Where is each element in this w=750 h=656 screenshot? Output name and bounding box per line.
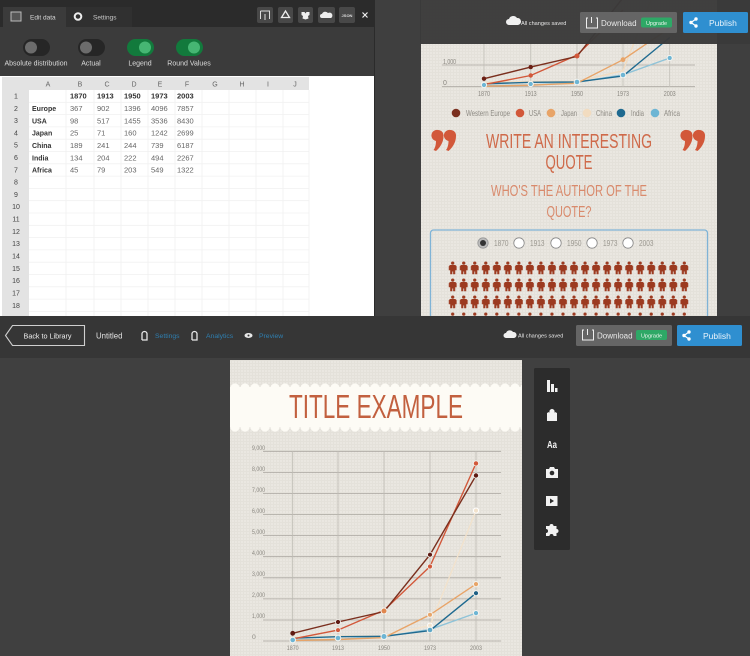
publish button: Publish (709, 18, 737, 28)
data values: 203 (124, 166, 137, 174)
top toolbar: save, download, publish: All changes saved (521, 21, 566, 27)
y axis labels: 2,000 (252, 592, 265, 599)
export icons: JSON (342, 13, 353, 18)
row numbers: 18 (12, 303, 20, 310)
row numbers: 17 (12, 290, 20, 298)
series: Japan (293, 582, 479, 640)
icon: right quote mark (680, 130, 705, 151)
legend: China (596, 108, 612, 118)
column headers: E (158, 82, 163, 88)
row numbers: 7 (14, 168, 18, 174)
y axis labels: 8,000 (252, 466, 265, 473)
line chart: upper crop: 1870 (478, 91, 490, 98)
legend: Africa (664, 108, 680, 118)
back to library button: Back to Library (24, 332, 72, 340)
quote author: QUOTE? (546, 204, 592, 221)
column headers: G (212, 82, 218, 88)
icon: gear (75, 13, 81, 20)
legend (452, 108, 680, 118)
line chart (252, 445, 501, 652)
region names: Europe (32, 106, 56, 113)
icon: table (11, 12, 21, 21)
data values: 1322 (177, 166, 194, 174)
back to library button (6, 326, 84, 346)
series: China (293, 508, 479, 637)
series: USA (293, 461, 479, 639)
download button: Upgrade (646, 21, 667, 27)
tab bar (3, 7, 132, 27)
data values: 2699 (177, 128, 194, 138)
column headers: F (185, 82, 189, 88)
options toolbar with toggles: Actual (81, 60, 101, 68)
header years: 1870 (70, 92, 87, 101)
download button: Download (601, 19, 637, 28)
tab bar: Settings (93, 14, 117, 22)
tab bar: Edit data (30, 14, 56, 22)
quote heading: WRITE AN INTERESTING (486, 131, 652, 153)
data values: 549 (151, 166, 164, 174)
row numbers: 4 (14, 130, 18, 138)
line chart: upper crop: 1950 (571, 91, 583, 98)
infographic page: quote section (421, 44, 717, 316)
data values: 4096 (151, 104, 168, 113)
data values: 6187 (177, 141, 194, 150)
header years: 1973 (151, 92, 168, 101)
data values: 222 (124, 153, 137, 162)
row numbers: 6 (14, 155, 18, 162)
line chart: upper crop: 2003 (664, 91, 676, 98)
panel: tool sidebar (534, 368, 570, 550)
icon: map (547, 409, 557, 421)
download button: Upgrade (641, 333, 662, 339)
data values: 494 (151, 153, 164, 162)
data values: 241 (97, 141, 110, 150)
navigation links: Analytics (206, 333, 234, 340)
document name: Untitled (96, 332, 122, 340)
column headers (46, 82, 297, 88)
data values: 189 (70, 141, 83, 150)
data values: 45 (70, 166, 78, 174)
row numbers (12, 94, 20, 310)
data values (70, 104, 194, 174)
region names: USA (32, 118, 47, 125)
radio year selector: 1913 (530, 239, 545, 248)
x axis labels: 2003 (470, 645, 482, 652)
row numbers: 14 (12, 254, 20, 260)
column headers: B (78, 82, 83, 88)
y axis labels: 6,000 (252, 508, 265, 515)
legend: Western Europe (466, 108, 510, 118)
icon: left quote mark (431, 130, 456, 151)
quote heading (486, 131, 652, 174)
radio year selector: 1973 (603, 239, 618, 248)
legend: India (631, 108, 644, 118)
pictogram box (430, 229, 708, 316)
x axis labels: 1870 (287, 645, 299, 652)
line chart: upper crop: 0 (443, 80, 447, 87)
y axis labels: 3,000 (252, 571, 265, 578)
row numbers: 15 (12, 266, 20, 273)
data values: 902 (97, 104, 110, 113)
panel: top-right editor view (421, 12, 748, 316)
header years: 1950 (124, 92, 141, 101)
panel: infographic page with title and chart (230, 360, 522, 656)
y axis labels (252, 445, 265, 641)
icon: chart (547, 380, 558, 392)
data values: 244 (124, 141, 137, 150)
row numbers: 10 (12, 204, 20, 211)
icon: video (546, 496, 558, 506)
row numbers: 2 (14, 106, 18, 113)
data values: 517 (97, 116, 110, 125)
icon: camera (546, 467, 558, 478)
y axis labels: 7,000 (252, 487, 265, 494)
panel: data editor (0, 0, 375, 316)
region names: China (32, 143, 52, 150)
options toolbar with toggles: Legend (128, 60, 152, 68)
publish button (677, 325, 742, 346)
data values: 739 (151, 141, 164, 150)
radio year selector: 2003 (639, 239, 654, 248)
region names: Japan (32, 130, 52, 138)
region names: Africa (32, 168, 52, 174)
title banner (230, 383, 522, 432)
options toolbar with toggles: Absolute distribution (4, 60, 68, 68)
x axis labels: 1973 (424, 645, 436, 652)
x axis labels: 1950 (378, 645, 390, 652)
data values: 367 (70, 104, 83, 113)
data values: 1455 (124, 116, 141, 125)
row numbers: 8 (14, 180, 18, 186)
row numbers: 9 (14, 192, 18, 199)
data values: 1396 (124, 104, 141, 113)
legend: Japan (561, 108, 577, 118)
series: Western Europe (290, 473, 479, 636)
panel: bottom editor top bar (0, 316, 750, 358)
line chart: upper crop (442, 44, 695, 96)
y axis labels: 5,000 (252, 529, 265, 536)
header years (70, 92, 194, 101)
y axis labels: 9,000 (252, 445, 265, 452)
y axis labels: 0 (252, 634, 256, 641)
column headers: I (267, 82, 269, 88)
x axis labels (287, 645, 482, 652)
export icons (257, 7, 368, 23)
download button (576, 325, 672, 346)
y axis labels: 1,000 (252, 613, 265, 620)
x axis labels: 1913 (332, 645, 344, 652)
options toolbar with toggles: Round Values (167, 60, 211, 68)
save status: All changes saved (518, 334, 563, 340)
radio year selector: 1870 (494, 239, 509, 248)
data values: 25 (70, 128, 78, 138)
line chart: upper crop: 1,000 (443, 59, 456, 66)
download button: Download (597, 332, 633, 340)
column headers: H (239, 82, 245, 88)
pictogram people (447, 261, 690, 316)
row numbers: 13 (12, 241, 20, 248)
icon: text: Aa (547, 439, 557, 451)
region names (32, 106, 56, 174)
column headers: J (293, 82, 297, 88)
row numbers: 16 (12, 278, 20, 285)
quote author (491, 183, 647, 221)
row numbers: 12 (12, 229, 20, 236)
data values: 134 (70, 153, 83, 162)
quote heading: QUOTE (546, 152, 592, 174)
publish button: Publish (703, 331, 731, 341)
icon: cloud saved (506, 16, 521, 25)
navigation links (142, 332, 283, 340)
header years: 2003 (177, 92, 194, 101)
publish button (683, 12, 748, 33)
row numbers: 3 (14, 118, 18, 125)
data values: 98 (70, 116, 78, 125)
line chart: upper crop: 1973 (617, 91, 629, 98)
radio year selector: 1950 (567, 239, 582, 248)
data values: 1242 (151, 128, 168, 138)
navigation links: Settings (155, 333, 180, 340)
options toolbar with toggles (0, 27, 374, 76)
row numbers: 11 (12, 216, 20, 224)
column headers: D (131, 82, 137, 88)
line chart: upper crop: 1913 (525, 91, 537, 98)
series: India (293, 591, 479, 638)
navigation links: Preview (259, 333, 283, 340)
region names: India (32, 155, 48, 162)
data values: 2267 (177, 153, 194, 162)
top toolbar: save, download, publish (375, 0, 750, 44)
radio year selector (478, 238, 654, 248)
row numbers: 5 (14, 142, 18, 150)
data values: 7857 (177, 104, 194, 113)
row numbers: 1 (14, 94, 18, 100)
series: Africa (293, 610, 479, 640)
title: TITLE EXAMPLE (289, 388, 463, 425)
data values: 79 (97, 166, 105, 174)
column headers: A (46, 82, 51, 88)
icon: puzzle (546, 524, 558, 536)
save status (504, 330, 563, 340)
data values: 204 (97, 153, 110, 162)
data values: 71 (97, 128, 105, 138)
quote author: WHO'S THE AUTHOR OF THE (491, 183, 647, 200)
y axis labels: 4,000 (252, 550, 265, 557)
data values: 8430 (177, 116, 194, 125)
legend: USA (529, 108, 541, 118)
column headers: C (104, 82, 110, 88)
header years: 1913 (97, 92, 114, 101)
download button (580, 12, 677, 33)
spreadsheet (0, 76, 374, 316)
data values: 3536 (151, 116, 168, 125)
markers at low values (290, 608, 433, 643)
data values: 160 (124, 128, 137, 138)
